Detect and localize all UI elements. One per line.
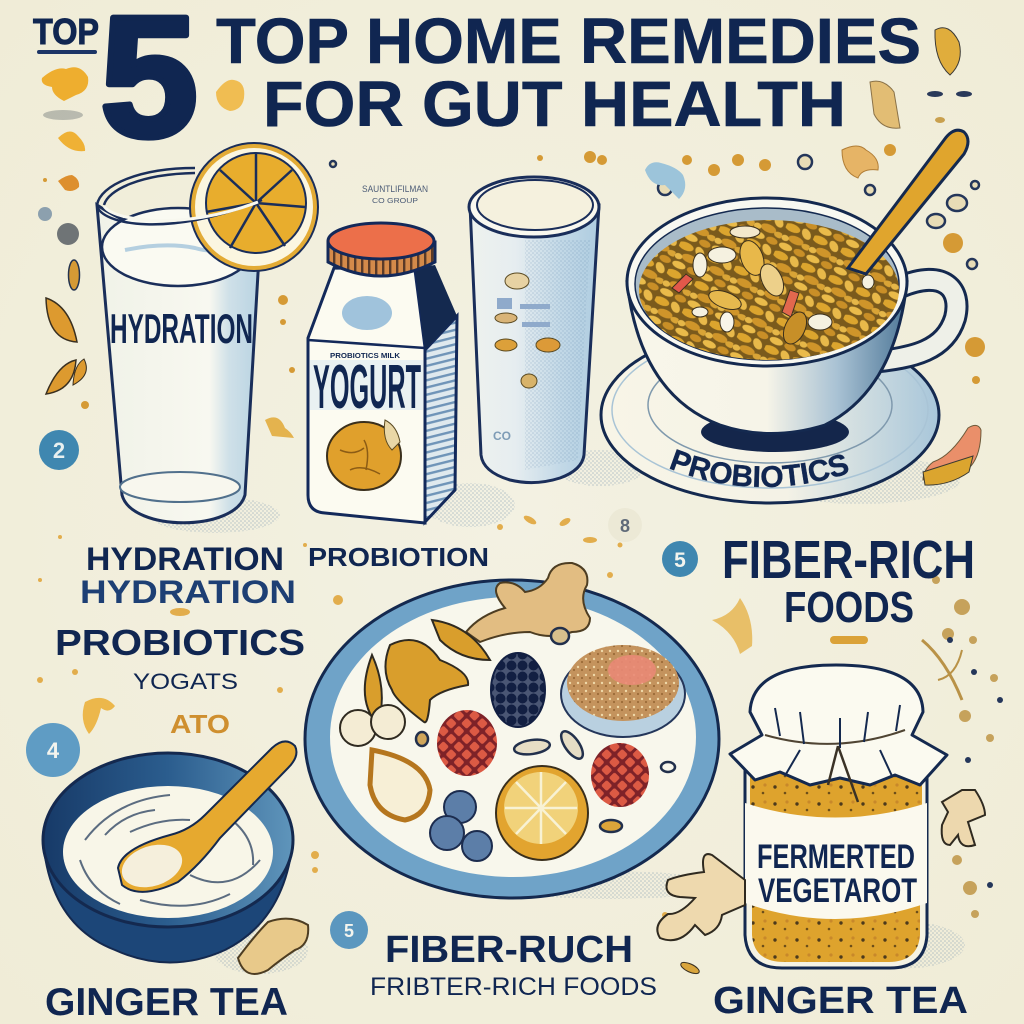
text block: hydration: HYDRATION — [86, 541, 284, 577]
number badge 4 — [26, 723, 80, 777]
number badge 5 fiber heading: 5 — [674, 549, 686, 572]
icon: yogurt carton — [308, 223, 457, 523]
water surface — [102, 208, 254, 286]
number badge 5 bottom — [330, 911, 368, 949]
icon: yogurt carton: YOGURT — [313, 353, 421, 422]
raspberry right — [591, 743, 649, 807]
blueberries — [430, 791, 492, 861]
icon: ginger root bottom — [238, 919, 308, 974]
icon: ginger right of jar — [942, 790, 985, 846]
stipple shadows — [150, 450, 965, 974]
title line 1: TOP HOME REMEDIES — [216, 5, 921, 77]
carton side panel — [425, 316, 457, 522]
text block: probiotion: PROBIOTION — [308, 542, 489, 572]
text block: probiotics yogats: YOGATS — [133, 669, 238, 694]
text block: ginger tea left: GINGER TEA — [45, 981, 288, 1024]
carton cap — [328, 223, 435, 276]
nut illustration — [327, 420, 401, 490]
title line 2: FOR GUT HEALTH — [263, 68, 846, 140]
glass base — [120, 472, 240, 502]
label: hydration: HYDRATION — [110, 305, 253, 352]
bowl body — [43, 840, 293, 962]
icon: fermented vegetable jar: VEGETAROT — [758, 872, 917, 910]
raspberry left — [437, 710, 497, 776]
spoon — [848, 130, 968, 274]
number badge 2 — [39, 430, 79, 470]
icon: hydration glass with lemon — [97, 143, 318, 523]
jar body — [745, 760, 927, 968]
yogurt — [63, 786, 273, 918]
text block: probiotics yogats: PROBIOTICS — [55, 622, 305, 663]
plate — [305, 580, 719, 898]
number badge 4: 4 — [47, 738, 60, 763]
golden leaves — [365, 620, 490, 725]
text block: fiber-rich bottom: FRIBTER-RICH FOODS — [370, 973, 657, 1001]
cloth cover — [730, 665, 947, 785]
granola — [639, 220, 899, 360]
faint micro text: SAUNTLIFILMAN — [362, 184, 428, 194]
heading: fiber-rich foods — [722, 530, 975, 632]
glass body — [97, 205, 262, 523]
text block: hydration: HYDRATION — [80, 574, 296, 610]
micro text: PROBIOTICS MILK — [330, 353, 400, 360]
jar contents lower — [752, 905, 920, 962]
text block: fiber-rich bottom: FIBER-RUCH — [385, 929, 633, 971]
saucer — [601, 327, 939, 503]
number badge 5 fiber heading — [662, 541, 698, 577]
bowl rim — [43, 753, 293, 927]
icon: yogurt bowl with spoon — [43, 741, 296, 962]
seeds — [416, 628, 675, 832]
jar text: FERMERTED — [757, 838, 915, 876]
blackberry — [491, 653, 545, 727]
jar label — [745, 803, 927, 919]
faint micro text: CO GROUP — [372, 198, 418, 205]
icon: ginger left of jar — [657, 854, 745, 940]
faint number badge — [608, 508, 642, 542]
icon: milk glass: CO — [493, 429, 511, 443]
glass rim — [97, 168, 262, 224]
title prefix: top: TOP — [33, 11, 99, 52]
lemon slice — [190, 143, 318, 271]
banana slice — [370, 750, 430, 820]
faint micro text — [362, 184, 428, 205]
lemon slice on plate — [496, 766, 588, 860]
heading: fiber-rich foods: FOODS — [784, 583, 914, 632]
title — [33, 0, 921, 173]
text block: fiber-rich bottom — [370, 929, 657, 1001]
icon: fermented vegetable jar — [730, 665, 947, 968]
number badge 5 bottom: 5 — [344, 921, 354, 941]
text block: hydration — [80, 541, 296, 610]
icon: granola cup on saucer — [600, 128, 970, 504]
label: probiotics: PROBIOTICS — [670, 449, 848, 488]
jar contents upper — [750, 770, 922, 818]
cup handle — [870, 280, 957, 362]
carton front — [308, 268, 425, 523]
plate of fiber-rich foods — [305, 563, 719, 898]
bowl of grains — [561, 645, 685, 737]
nut slices — [340, 705, 405, 746]
faint number badge: 8 — [620, 516, 630, 536]
icon: milk glass — [469, 177, 599, 483]
dark gable — [415, 265, 457, 350]
text block: ginger tea right: GINGER TEA — [713, 980, 968, 1022]
text block: probiotics yogats — [55, 622, 305, 694]
number badge 2: 2 — [53, 438, 65, 463]
icon: salmon slice — [923, 425, 981, 485]
spoon — [118, 741, 296, 892]
cup bowl — [627, 282, 907, 434]
stray letters: ato: ATO — [170, 709, 230, 739]
ginger root — [466, 563, 590, 642]
